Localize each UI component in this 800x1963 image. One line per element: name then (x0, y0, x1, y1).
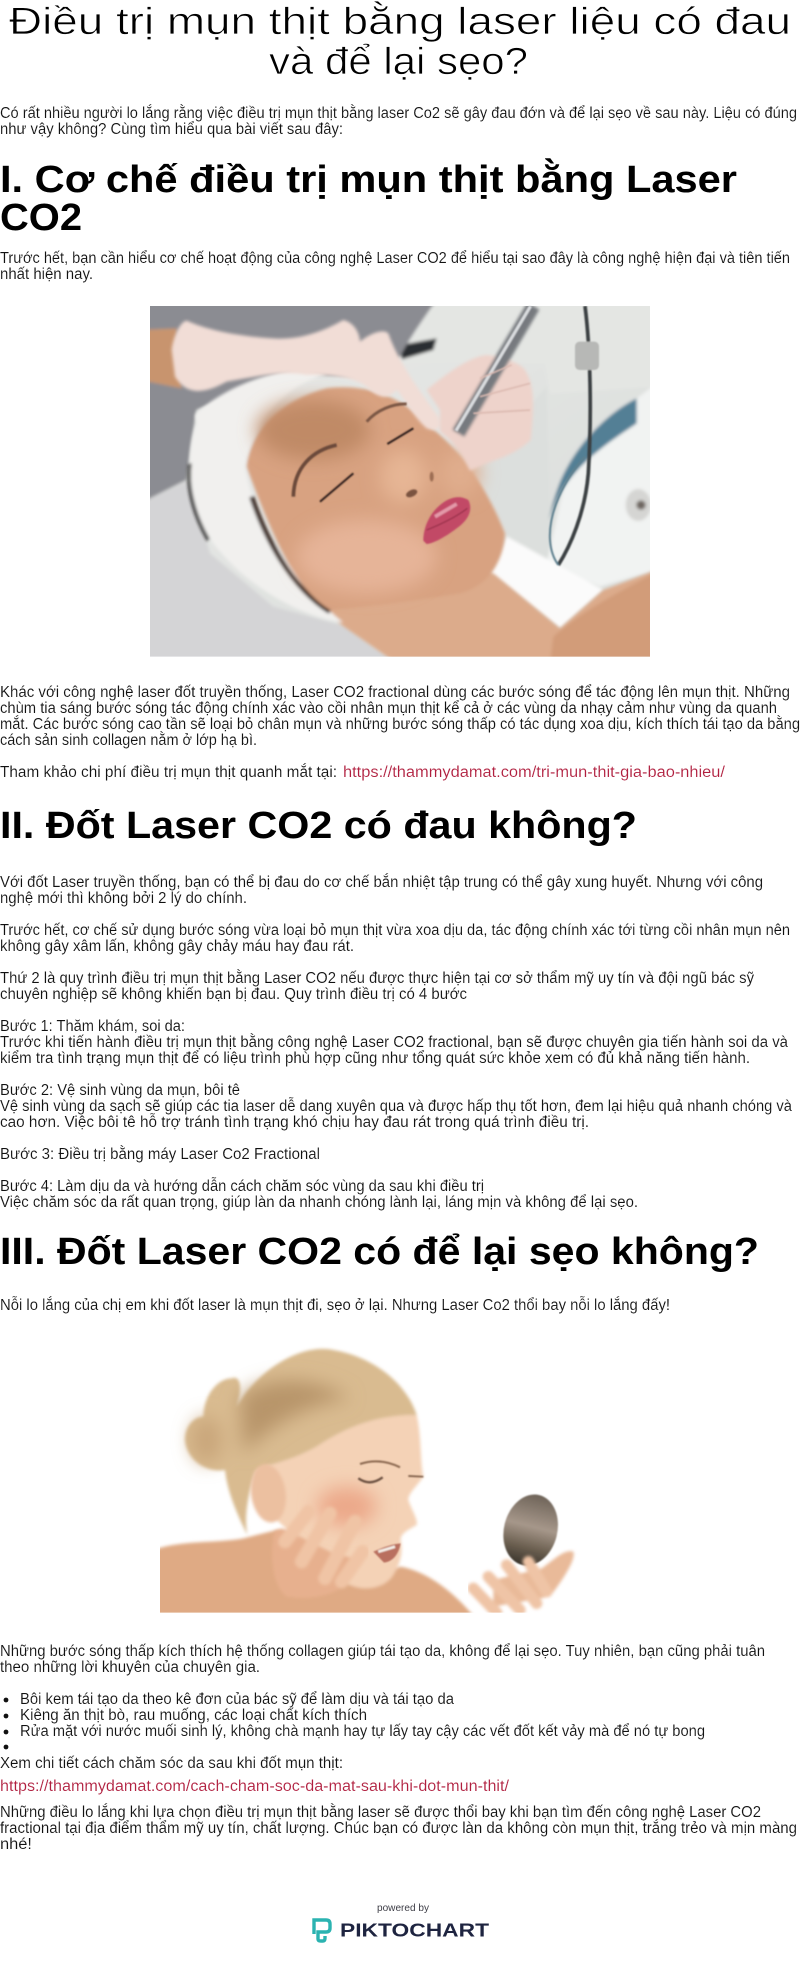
step 2 (0, 1082, 792, 1131)
piktochart footer logo (314, 1902, 489, 1941)
title (9, 0, 791, 83)
step 1 (0, 1018, 788, 1067)
step 1: Bước 1: Thăm khám, soi da: (0, 1018, 185, 1035)
section III lead sentence: Nỗi lo lắng của chị em khi đốt laser là mụn thịt đi, sẹo ở lại. Nhưng Laser Co2 thổi bay nỗi lo lắng đấy! (0, 1297, 670, 1314)
reference link: treatment cost: Tham khảo chi phí điều trị mụn thịt quanh mắt tại: (0, 764, 337, 781)
title: và để lại sẹo? (269, 41, 528, 83)
aftercare link: https://thammydamat.com/cach-cham-soc-da-mat-sau-khi-dot-mun-thit/ (0, 1778, 510, 1795)
section I lead paragraph: nhất hiện nay. (0, 266, 93, 283)
photo: blonde woman checking her skin in a mirror (153, 1349, 574, 1620)
conclusion paragraph (0, 1804, 797, 1853)
conclusion paragraph: fractional tại địa điểm thẩm mỹ uy tín, chất lượng. Chúc bạn có được làn da không còn mụn thịt, trắng trẻo và mịn màng (0, 1820, 797, 1837)
conclusion paragraph: Những điều lo lắng khi lựa chọn điều trị mụn thịt bằng laser sẽ được thổi bay khi bạn tìm đến công nghệ Laser CO2 (0, 1804, 761, 1821)
section III closing paragraph: theo những lời khuyên của chuyên gia. (0, 1659, 260, 1676)
heading: section II: II. Đốt Laser CO2 có đau không? (0, 804, 637, 847)
bullet list: aftercare advice: Bôi kem tái tạo da theo kê đơn của bác sỹ để làm dịu và tái tạo da (20, 1691, 454, 1708)
section I lead paragraph (0, 250, 790, 283)
heading: section III: III. Đốt Laser CO2 có để lại sẹo không? (0, 1230, 759, 1273)
section II paragraphs: Với đốt Laser truyền thống, bạn có thể bị đau do cơ chế bắn nhiệt tập trung có thể gây xung huyết. Nhưng với công (0, 874, 763, 891)
reference link: treatment cost: https://thammydamat.com/tri-mun-thit-gia-bao-nhieu/ (343, 764, 726, 781)
intro paragraph: như vậy không? Cùng tìm hiểu qua bài viết sau đây: (0, 121, 343, 138)
section II paragraphs: chuyên nghiệp sẽ không khiến bạn bị đau. Quy trình điều trị có 4 bước (0, 986, 467, 1003)
heading: section I (0, 157, 737, 239)
step 3: Bước 3: Điều trị bằng máy Laser Co2 Fractional (0, 1146, 320, 1163)
section II paragraphs: nghệ mới thì không bởi 2 lý do chính. (0, 890, 247, 907)
section II paragraphs: không gây xâm lấn, không gây chảy máu hay đau rát. (0, 938, 354, 955)
bullet list: aftercare advice: Kiêng ăn thịt bò, rau muống, các loại chất kích thích (20, 1707, 367, 1724)
section III closing paragraph (0, 1643, 765, 1676)
aftercare link (0, 1755, 510, 1795)
aftercare link: Xem chi tiết cách chăm sóc da sau khi đốt mụn thịt: (0, 1755, 343, 1772)
photo: laser treatment on a woman's face (140, 300, 657, 663)
step 1: Trước khi tiến hành điều trị mụn thịt bằng công nghệ Laser CO2 fractional, bạn sẽ được chuyên gia tiến hành soi da và (0, 1034, 788, 1051)
paragraph: fractional laser mechanism (0, 684, 800, 749)
section III closing paragraph: Những bước sóng thấp kích thích hệ thống collagen giúp tái tạo da, không để lại sẹo. Tuy nhiên, bạn cũng phải tuân (0, 1643, 765, 1660)
step 1: kiểm tra tình trạng mụn thịt để có liệu trình phù hợp cũng như tổng quát sức khỏe xem có đủ khả năng tiến hành. (0, 1050, 750, 1067)
piktochart footer logo: PIKTOCHART (340, 1920, 489, 1940)
section II paragraphs (0, 874, 790, 1003)
paragraph: fractional laser mechanism: Khác với công nghệ laser đốt truyền thống, Laser CO2 fractional dùng các bước sóng để tác động lên mụn thịt. Những (0, 684, 790, 701)
bullet list: aftercare advice (4, 1691, 705, 1749)
section II paragraphs: Thứ 2 là quy trình điều trị mụn thịt bằng Laser CO2 nếu được thực hiện tại cơ sở thẩm mỹ uy tín và đội ngũ bác sỹ (0, 970, 754, 987)
step 2: Bước 2: Vệ sinh vùng da mụn, bôi tê (0, 1082, 240, 1099)
piktochart footer logo: powered by (377, 1902, 430, 1914)
heading: section I: CO2 (0, 196, 82, 239)
reference link: treatment cost (0, 764, 726, 781)
step 4: Bước 4: Làm dịu da và hướng dẫn cách chăm sóc vùng da sau khi điều trị (0, 1178, 484, 1195)
conclusion paragraph: nhé! (0, 1836, 32, 1853)
paragraph: fractional laser mechanism: chùm tia sáng bước sóng tác động chính xác vào cồi nhân mụn thịt kể cả ở các vùng da nhạy cảm như vùng da quanh (0, 700, 777, 717)
step 4 (0, 1178, 638, 1211)
title: Điều trị mụn thịt bằng laser liệu có đau (9, 0, 791, 43)
step 4: Việc chăm sóc da rất quan trọng, giúp làn da nhanh chóng lành lại, láng mịn và không để lại sẹo. (0, 1194, 638, 1211)
heading: section I: I. Cơ chế điều trị mụn thịt bằng Laser (0, 157, 737, 201)
paragraph: fractional laser mechanism: cách sản sinh collagen nằm ở lớp hạ bì. (0, 732, 257, 749)
bullet list: aftercare advice: Rửa mặt với nước muối sinh lý, không chà mạnh hay tự lấy tay cậy các vết đốt kết vảy mà để nó tự bong (20, 1723, 705, 1740)
step 2: cao hơn. Việc bôi tê hỗ trợ tránh tình trạng khó chịu hay đau rát trong quá trình điều trị. (0, 1114, 589, 1131)
intro paragraph (0, 105, 797, 138)
icon: piktochart P mark (314, 1920, 330, 1941)
